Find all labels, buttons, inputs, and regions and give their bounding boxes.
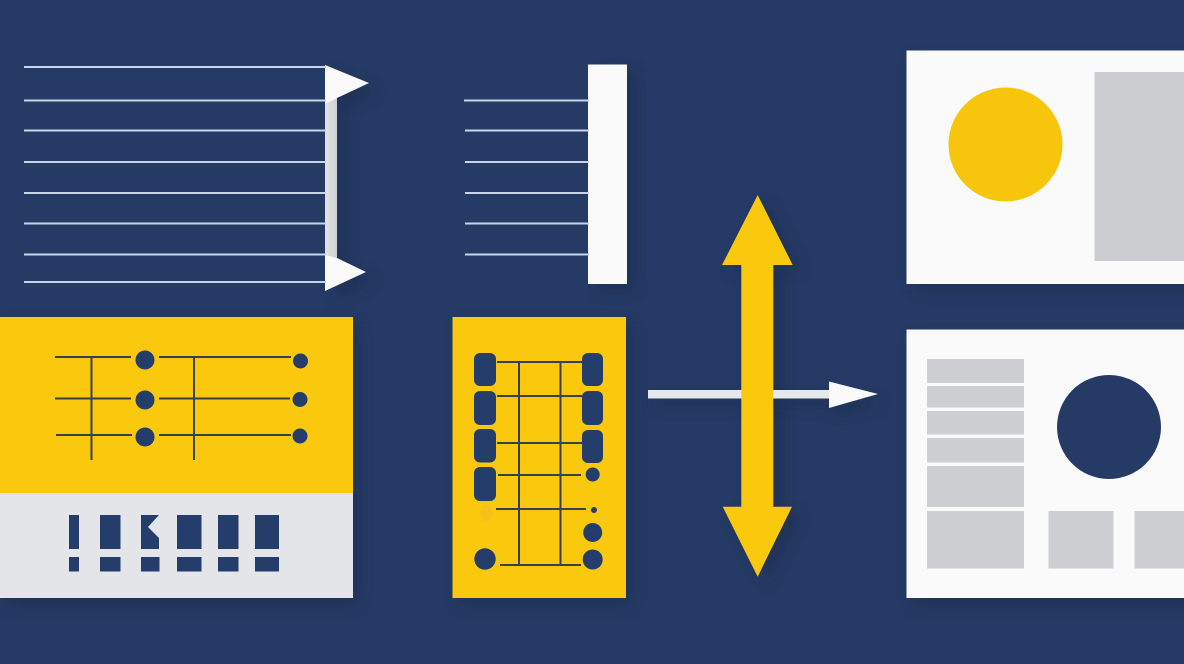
six horizontal lines bbox=[464, 100, 589, 254]
arrow: yellow double vertical bbox=[722, 195, 793, 577]
panel: lines into bracket with flags bbox=[24, 65, 378, 300]
bracket bar with two arrowheads bbox=[325, 65, 369, 291]
shadow: network card bbox=[6, 324, 359, 605]
shadow: top card bbox=[912, 58, 1184, 290]
shadow: bracket bbox=[334, 74, 378, 300]
panel: lines into white bar bbox=[464, 64, 635, 291]
yellow circle bbox=[948, 88, 1062, 202]
faint blob bbox=[480, 505, 492, 521]
panel: white card with yellow circle bbox=[906, 50, 1184, 290]
shadow: white bar bbox=[596, 72, 635, 291]
grey block bbox=[1094, 72, 1184, 261]
yellow card bbox=[452, 317, 626, 598]
stacked grey rows bbox=[927, 359, 1024, 568]
grey squares bbox=[1048, 511, 1184, 568]
arrow shaft bbox=[648, 390, 830, 398]
white vertical bar bbox=[588, 64, 627, 284]
shadow: white arrow bbox=[654, 390, 884, 417]
network nodes bbox=[136, 350, 308, 446]
left pills bbox=[474, 353, 496, 501]
yellow area bbox=[0, 317, 353, 494]
panel: yellow grid card bbox=[452, 317, 632, 605]
shadow: bottom card bbox=[912, 337, 1184, 605]
white card bbox=[906, 330, 1184, 598]
right pills bbox=[582, 353, 603, 463]
footer glyph blocks bbox=[69, 515, 279, 572]
panel: white card with navy circle bbox=[906, 330, 1184, 605]
shadow: yellow arrow bbox=[731, 202, 802, 584]
arrow: white horizontal bbox=[648, 382, 884, 417]
grid lines bbox=[496, 362, 586, 565]
grey footer bbox=[0, 493, 353, 598]
grid nodes bbox=[474, 468, 603, 570]
navy circle bbox=[1057, 375, 1161, 479]
arrow head bbox=[829, 382, 878, 408]
shadow: grid card bbox=[458, 324, 632, 605]
white card bbox=[906, 50, 1184, 284]
eight horizontal lines bbox=[24, 67, 326, 282]
network lines bbox=[55, 357, 291, 460]
panel: yellow network card with grey footer bbox=[0, 317, 359, 605]
